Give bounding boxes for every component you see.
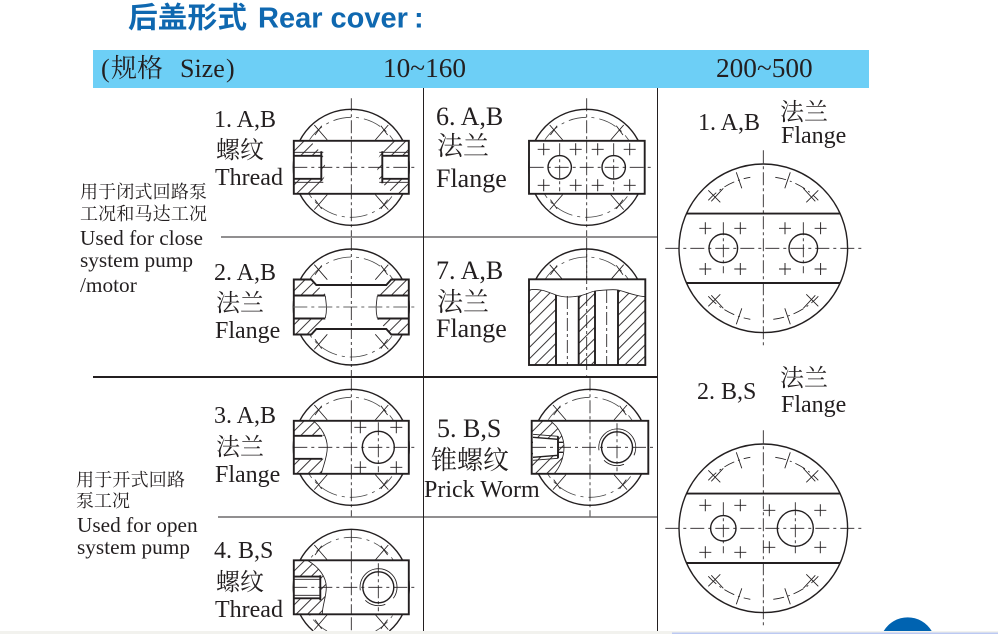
text block: closed circuit usage: 用于闭式回路泵 [80, 182, 207, 202]
icon: blue circle fragment [884, 617, 932, 631]
label: 5. B,S prick worm: 锥螺纹 [431, 446, 509, 475]
label: 2. A,B flange [214, 260, 280, 344]
label: 4. B,S thread: 4. B,S [214, 538, 273, 564]
header band: size row: Size [180, 54, 225, 83]
label: large 1. A,B flange: Flange [781, 123, 846, 149]
diagram 5: tapered thread [532, 378, 654, 516]
label: 3. A,B flange: 3. A,B [214, 403, 276, 429]
text block: closed circuit usage: 工况和马达工况 [80, 204, 207, 224]
text block: closed circuit usage: system pump [80, 248, 193, 272]
header band: size row: 10~160 [383, 53, 466, 83]
diagram 7: flange section [529, 238, 645, 376]
header band: size row: 规格 [111, 54, 163, 83]
diagram 2: flange [293, 238, 415, 376]
title: : [414, 2, 424, 34]
diagram 6: flange two ports [529, 98, 651, 236]
text block: open circuit usage: 用于开式回路 [76, 470, 185, 490]
label: 2. A,B flange: Flange [215, 318, 280, 344]
diagram 4: thread with port [293, 529, 415, 631]
bottom strip [0, 631, 998, 634]
label: 6. A,B flange [436, 102, 507, 193]
label: 3. A,B flange: 法兰 [216, 434, 264, 461]
label: large 1. A,B flange: 法兰 [780, 99, 828, 126]
label: 3. A,B flange [214, 403, 280, 488]
label: large 1. A,B flange: 1. A,B [698, 110, 760, 136]
table grid lines [93, 88, 658, 631]
text block: closed circuit usage: /motor [80, 273, 137, 297]
header band: size row [93, 50, 869, 88]
title: 后盖形式 [128, 2, 247, 34]
label: 7. A,B flange: 7. A,B [436, 256, 503, 285]
label: 5. B,S prick worm: 5. B,S [437, 414, 501, 443]
text block: closed circuit usage [80, 182, 207, 297]
label: large 2. B,S flange: 2. B,S [697, 379, 756, 405]
text block: open circuit usage [76, 470, 198, 559]
label: 4. B,S thread [214, 538, 283, 623]
label: 4. B,S thread: 螺纹 [216, 569, 264, 596]
label: 2. A,B flange: 法兰 [216, 290, 264, 317]
header band: size row: ) [226, 54, 235, 83]
label: 3. A,B flange: Flange [215, 462, 280, 488]
diagram large 1: flange two equal ports [665, 150, 861, 346]
diagram 1: thread [293, 98, 415, 236]
label: 1. A,B thread: 螺纹 [216, 137, 264, 164]
label: 4. B,S thread: Thread [215, 597, 283, 623]
header band: size row: 200~500 [716, 53, 813, 83]
text block: open circuit usage: 泵工况 [76, 491, 130, 511]
title [128, 2, 424, 34]
label: 6. A,B flange: 法兰 [437, 132, 489, 161]
label: large 1. A,B flange [698, 99, 846, 149]
label: 1. A,B thread [214, 107, 283, 191]
text block: open circuit usage: system pump [77, 535, 190, 559]
label: large 2. B,S flange: Flange [781, 392, 846, 418]
label: large 2. B,S flange: 法兰 [780, 365, 828, 392]
label: 7. A,B flange: Flange [436, 314, 507, 343]
label: 1. A,B thread: Thread [215, 165, 283, 191]
title: Rear cover [258, 2, 408, 34]
label: 6. A,B flange: Flange [436, 164, 507, 193]
diagram large 2: flange unequal ports [665, 430, 861, 626]
label: 7. A,B flange [436, 256, 507, 343]
label: 5. B,S prick worm: Prick Worm [424, 477, 540, 503]
label: 5. B,S prick worm [424, 414, 540, 503]
label: large 2. B,S flange [697, 365, 846, 418]
header band: size row: ( [101, 54, 110, 83]
label: 2. A,B flange: 2. A,B [214, 260, 276, 286]
text block: open circuit usage: Used for open [77, 513, 198, 537]
diagram 3: flange with port [293, 378, 415, 516]
label: 1. A,B thread: 1. A,B [214, 107, 276, 133]
text block: closed circuit usage: Used for close [80, 226, 203, 250]
label: 7. A,B flange: 法兰 [437, 288, 489, 317]
label: 6. A,B flange: 6. A,B [436, 102, 503, 131]
